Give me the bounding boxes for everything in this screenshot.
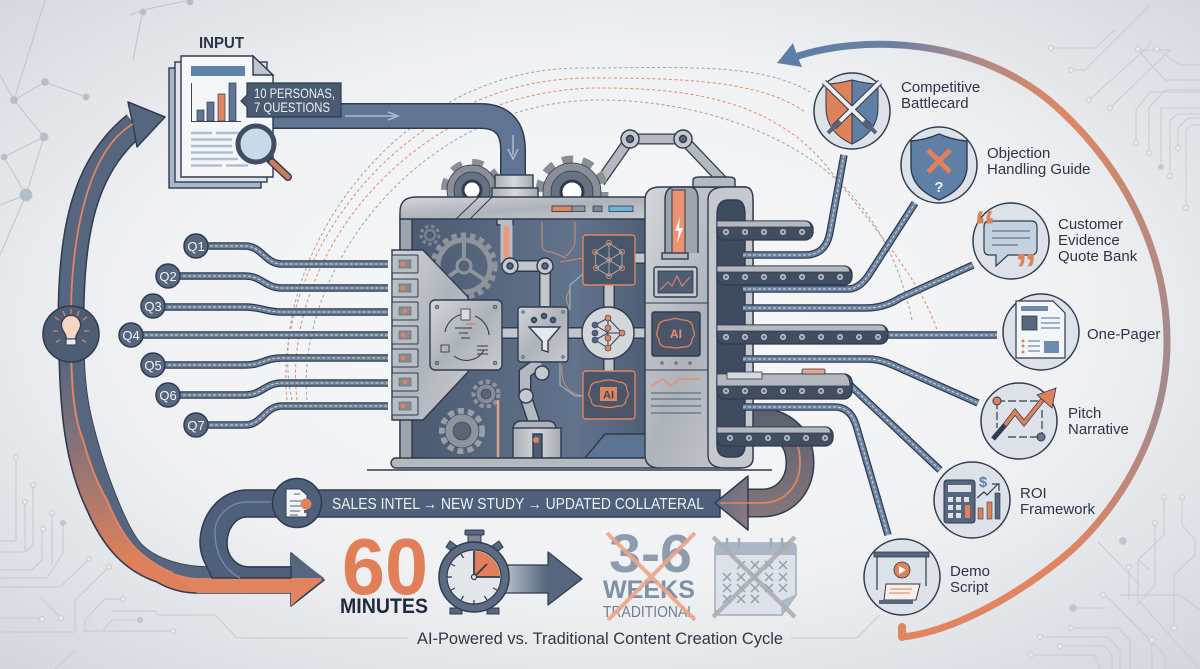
stat: 3-6 weeks traditional <box>603 524 695 621</box>
machine left column <box>400 219 412 459</box>
vertical thin pipe <box>497 400 499 458</box>
inlet plate <box>392 250 468 420</box>
label: roi framework: ROI <box>1020 485 1047 502</box>
icon: calculator and bars <box>934 462 1010 538</box>
node: Q6: Q6 <box>159 388 177 403</box>
stat: 3-6 weeks traditional: 3-6 <box>609 524 692 584</box>
output: pitch narrative <box>981 383 1129 459</box>
coolant tube <box>497 219 513 261</box>
arrow: large feedback arc <box>777 43 1167 637</box>
arrow: sales intel loop band: SALES INTEL → NEW STUDY → UPDATED COLLATERAL <box>332 496 704 513</box>
conveyor: row 2 <box>717 266 852 285</box>
conveyor: row 4 <box>717 369 852 399</box>
node: Q3 <box>141 294 165 318</box>
icon: sales intel document <box>272 478 322 528</box>
small gear <box>422 227 438 243</box>
conveyor: row 5 <box>717 427 833 446</box>
machine interior <box>400 215 650 460</box>
decoration: network top-left <box>0 0 193 255</box>
machine <box>367 130 772 470</box>
label: one-pager: One-Pager <box>1087 326 1160 343</box>
pipe joints <box>502 258 553 274</box>
label: pitch narrative: Pitch <box>1068 405 1101 422</box>
node: Q1 <box>184 234 208 258</box>
ground line <box>367 469 772 471</box>
output conveyors <box>717 221 888 446</box>
lightning traces <box>560 268 607 396</box>
network module <box>583 235 635 285</box>
document header <box>191 66 245 76</box>
arrow: left downward to 60 minutes <box>59 350 324 606</box>
callout: personas and questions: 10 PERSONAS, <box>254 85 335 101</box>
arrow: sales intel loop band <box>200 476 755 578</box>
label: competitive battlecard: Battlecard <box>901 95 969 112</box>
pipe collar <box>492 175 538 198</box>
icon: video screen and script <box>864 539 940 615</box>
AI module lower <box>583 371 635 419</box>
pipes fill <box>500 258 648 372</box>
top frame <box>400 197 660 219</box>
node: Q6 <box>156 383 180 407</box>
icon: calculator and bars: $ <box>979 474 988 491</box>
funnel module <box>518 307 568 362</box>
inlet sockets <box>392 255 418 415</box>
label: objection handling guide: Handling Guide <box>987 161 1090 178</box>
label: pitch narrative: Narrative <box>1068 421 1129 438</box>
conveyor: row 3 <box>717 325 888 344</box>
node: Q7 <box>184 413 208 437</box>
label: customer evidence quote bank: Evidence <box>1058 232 1120 249</box>
pipes between modules <box>500 258 648 372</box>
bar chart <box>192 83 241 122</box>
callout: personas and questions: 7 QUESTIONS <box>254 99 330 115</box>
decoration: circuit bottom-right <box>1028 494 1200 669</box>
node: Q4 <box>119 323 143 347</box>
icon: quote bubble: “ <box>974 202 996 251</box>
output: customer evidence quote bank <box>973 202 1138 294</box>
icon: magnifying glass <box>238 126 288 177</box>
heading: input: INPUT <box>199 35 244 52</box>
socket marks <box>401 262 407 408</box>
node: Q5 <box>141 353 165 377</box>
document stack <box>169 56 273 188</box>
panel: input document <box>169 35 518 188</box>
document text lines <box>191 133 248 166</box>
icon: shield with x: ? <box>934 179 944 196</box>
lower gears <box>442 382 498 451</box>
label: customer evidence quote bank: Customer <box>1058 216 1123 233</box>
arrow: stopwatch to traditional <box>505 552 582 605</box>
node: Q5: Q5 <box>144 358 162 373</box>
label: customer evidence quote bank: Quote Bank <box>1058 248 1138 265</box>
large gear <box>433 235 495 297</box>
stat: 3-6 weeks traditional: WEEKS <box>603 576 695 604</box>
icon: quote bubble: ” <box>1015 245 1037 294</box>
label: competitive battlecard: Competitive <box>901 79 980 96</box>
label: objection handling guide: Objection <box>987 145 1050 162</box>
output: competitive battlecard <box>814 73 980 149</box>
node: Q3: Q3 <box>144 299 162 314</box>
icon: quote bubble <box>973 202 1049 294</box>
icon: crossed-out calendar <box>713 537 796 617</box>
icon: shield and swords <box>814 73 890 149</box>
robot arm top <box>600 130 722 182</box>
machine right tower: AI <box>670 327 682 341</box>
processing module <box>430 300 502 370</box>
floor slab <box>585 434 647 458</box>
gears on top <box>445 160 604 224</box>
output: objection handling guide <box>901 127 1090 203</box>
caption with lines: AI-Powered vs. Traditional Content Creation Cycle <box>417 629 783 648</box>
decoration: circuit bottom-left <box>0 456 408 669</box>
decoration: circuit top-right <box>1048 5 1200 210</box>
lower robot arm <box>513 362 561 458</box>
node: Q2: Q2 <box>159 269 177 284</box>
stat: 60: 60 <box>342 522 428 611</box>
decoration: dashed orbit arcs <box>286 68 937 400</box>
callout: personas and questions <box>241 83 341 117</box>
icon: one-page document <box>1003 294 1079 370</box>
label: demo script: Script <box>950 579 989 596</box>
arrow: return arm from machine <box>735 420 800 503</box>
output: one-pager <box>1003 294 1160 370</box>
status indicators <box>552 206 633 212</box>
node: Q2 <box>156 264 180 288</box>
conveyor: row 1 <box>717 221 813 240</box>
node: Q7: Q7 <box>187 418 205 433</box>
node: Q4: Q4 <box>122 328 140 343</box>
label: demo script: Demo <box>950 563 990 580</box>
frame diagonals <box>456 197 492 219</box>
pipe: input to machine <box>273 112 518 178</box>
icon: rising arrow chart <box>981 383 1057 459</box>
question nodes Q1-Q7 <box>119 234 208 437</box>
neural network module <box>582 307 634 359</box>
caption with lines <box>417 615 880 648</box>
socket icons <box>399 260 411 410</box>
output: roi framework <box>934 462 1096 538</box>
output: demo script <box>864 539 990 615</box>
circuit traces <box>542 222 583 396</box>
base slab <box>391 458 666 468</box>
icon: shield with x <box>901 127 977 203</box>
label: roi framework: Framework <box>1020 501 1096 518</box>
conveyor belts to outputs <box>743 155 997 535</box>
arrow: left upward return to input <box>71 102 165 320</box>
question input lines <box>140 246 388 425</box>
stat: 3-6 weeks traditional: TRADITIONAL <box>603 604 695 621</box>
icon: lightbulb node <box>43 306 99 362</box>
AI module lower: AI <box>603 390 614 402</box>
stat label: minutes: MINUTES <box>340 595 428 618</box>
machine right tower <box>645 177 753 468</box>
icon: stopwatch <box>439 530 509 614</box>
node: Q1: Q1 <box>187 239 205 254</box>
